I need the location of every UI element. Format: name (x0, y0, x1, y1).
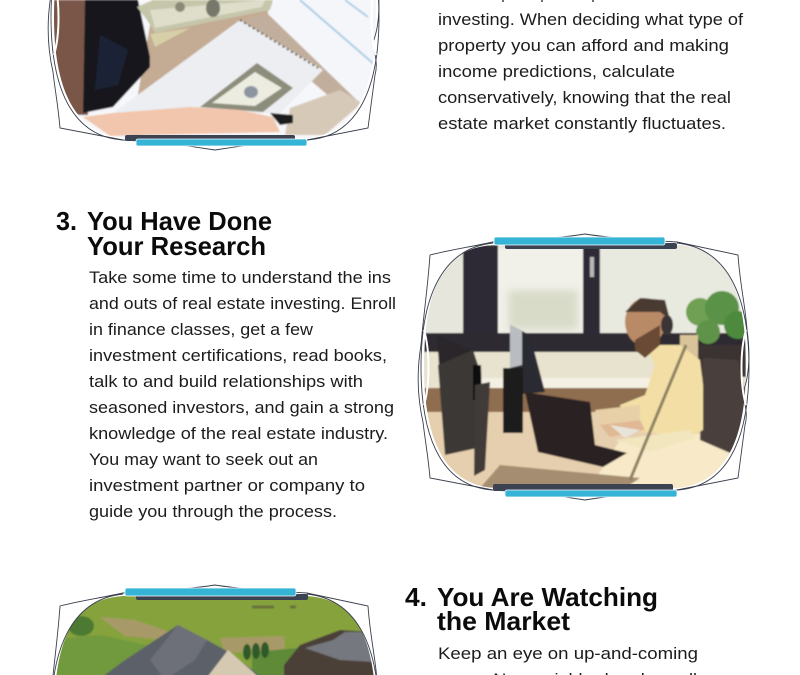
heading: 3. You Have Done Your Research: 3. (56, 206, 77, 236)
text block: research paragraph: talk to and build relationships with (89, 372, 363, 391)
text block: top right paragraph: conservatively, knowing that the real (438, 88, 731, 107)
text block: top right paragraph: investing. When deciding what type of (438, 10, 743, 29)
heading: 4. You Are Watching the Market (405, 582, 658, 636)
photo: hands counting money over a notebook (48, 0, 380, 150)
text block: research paragraph: and outs of real estate investing. Enroll (89, 294, 396, 313)
heading: 3. You Have Done Your Research: Your Research (87, 231, 266, 261)
text block: research paragraph: investment certifications, read books, (89, 346, 387, 365)
text block: research paragraph (89, 268, 396, 521)
photo: aerial view of house and green field (48, 585, 380, 675)
text block: top right paragraph: property you can afford and making (438, 36, 729, 55)
heading: 3. You Have Done Your Research: You Have Done (87, 206, 272, 236)
text block: top right paragraph (438, 0, 743, 133)
text block: top right paragraph: income predictions, calculate (438, 62, 675, 81)
bars: photo 1 bottom accents (125, 135, 307, 146)
text block: research paragraph: seasoned investors, and gain a strong (89, 398, 394, 417)
text block: research paragraph: investment partner or company to (89, 476, 365, 495)
text block: research paragraph: You may want to seek out an (89, 450, 318, 469)
text block: market paragraph: Keep an eye on up-and-coming (438, 644, 698, 663)
heading: 4. You Are Watching the Market: You Are Watching (437, 582, 658, 612)
heading: 4. You Are Watching the Market: the Market (437, 606, 570, 636)
heading: 4. You Are Watching the Market: 4. (405, 582, 427, 612)
text block: research paragraph: in finance classes, get a few (89, 320, 314, 339)
text block: top right paragraph: estate market constantly fluctuates. (438, 114, 726, 133)
bars: photo 3 top accents (125, 588, 308, 600)
bars: photo 2 bottom accents (493, 484, 677, 497)
text block: research paragraph: Take some time to understand the ins (89, 268, 391, 287)
text block: research paragraph: knowledge of the real estate industry. (89, 424, 388, 443)
bars: photo 2 top accents (494, 237, 677, 249)
heading: 3. You Have Done Your Research (56, 206, 272, 261)
text block: research paragraph: guide you through the process. (89, 502, 337, 521)
photo: man with headphones working at desk (418, 234, 752, 500)
text block: market paragraph (438, 644, 698, 675)
